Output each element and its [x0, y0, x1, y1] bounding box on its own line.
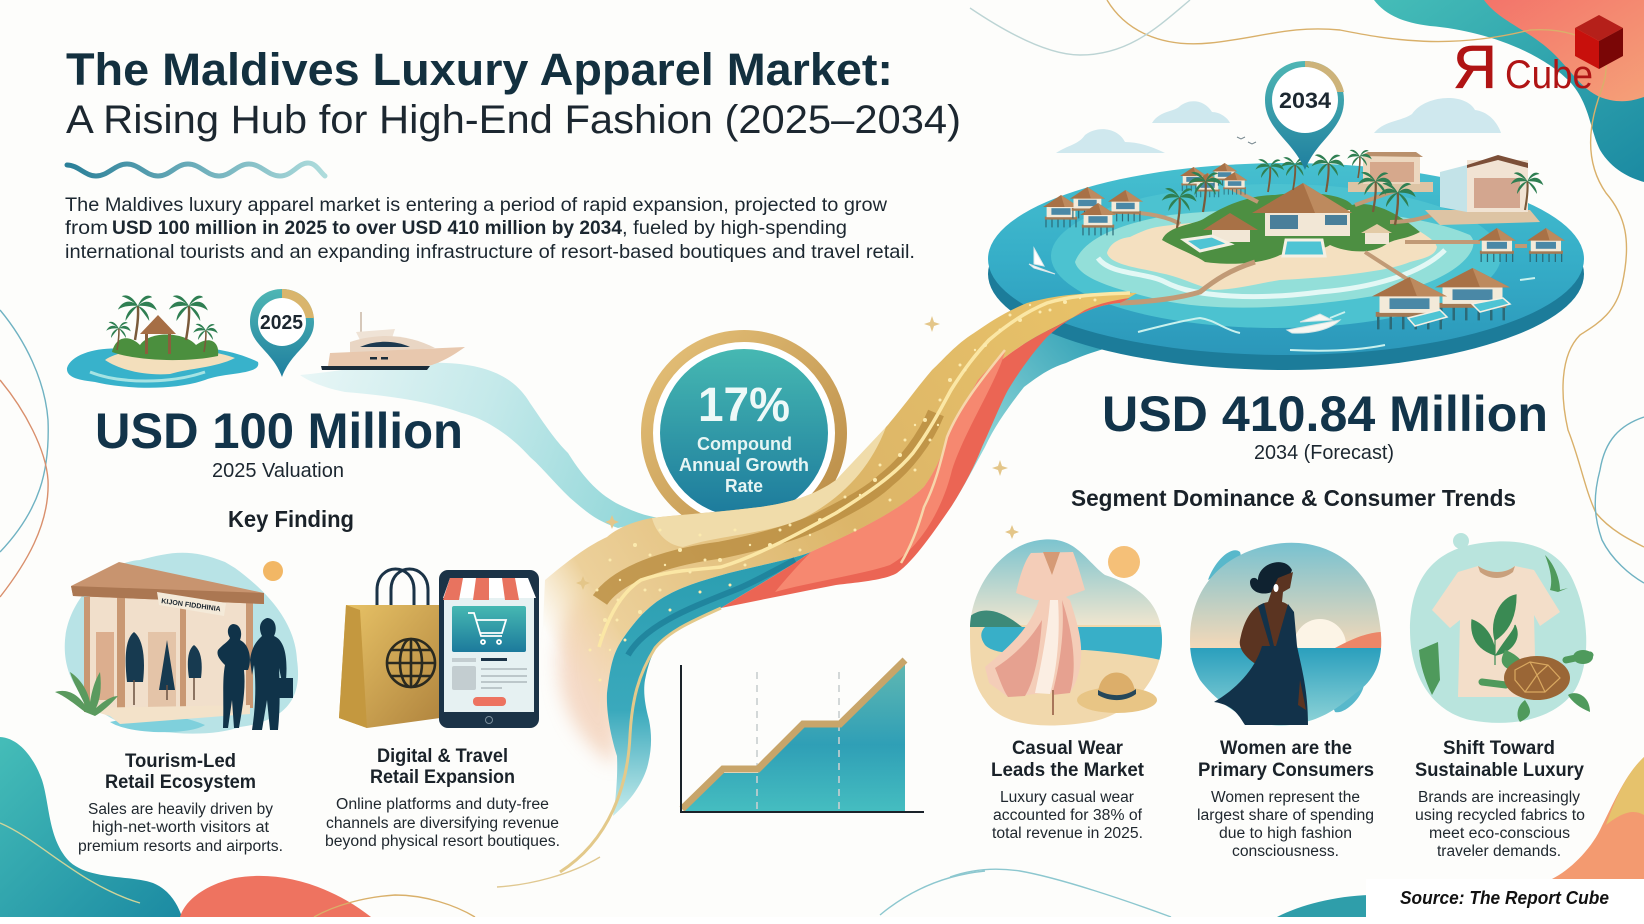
gold sparkles: [588, 297, 1096, 682]
overwater bungalows: [1043, 163, 1565, 329]
blob: bottom left teal: [0, 737, 182, 917]
text: sustainable luxury: Brands are increasingly: [1418, 789, 1580, 806]
title: A Rising Hub for High-End Fashion (2025–2034): [66, 98, 961, 142]
light gold strip near badge: [652, 427, 886, 547]
text: women consumers: largest share of spending: [1197, 807, 1374, 824]
logo: RCube: [1453, 15, 1623, 101]
tablet hero panel: [452, 606, 526, 652]
blob: bottom coral: [180, 876, 371, 917]
hair: [1250, 562, 1292, 594]
gold band: [540, 293, 1137, 760]
area chart: [681, 660, 924, 812]
gazebo: [140, 315, 176, 354]
palms on island: [1162, 150, 1543, 228]
salmon layer: [775, 352, 1005, 592]
intro paragraph: from: [65, 217, 108, 239]
dashed markers: [757, 672, 839, 811]
pools: [1184, 236, 1325, 256]
boat on disk: [1287, 314, 1340, 333]
shallow water swirl: [1075, 209, 1473, 308]
blob: bottom right coral and gold: [1552, 757, 1644, 879]
sun: [1108, 546, 1140, 578]
intro paragraph: USD 100 million in 2025 to over USD 410 million by 2034: [112, 217, 622, 239]
text: tourism-led retail ecosystem: Sales are heavily driven by: [88, 801, 273, 818]
chart growth line: [682, 660, 905, 809]
palms: [106, 295, 218, 352]
light teal ribbon from 2025 to growth badge: [300, 362, 660, 528]
text: tourism-led retail ecosystem: Tourism-Led: [125, 750, 236, 772]
heading: key finding: Key Finding: [228, 506, 354, 532]
mint blob: [1410, 541, 1586, 723]
blob: top right teal: [1374, 0, 1644, 182]
badge text: 17% CAGR: Annual Growth: [679, 455, 809, 475]
2034 clouds: [1056, 98, 1501, 153]
blob: bottom centre-right teal: [1277, 895, 1370, 917]
arm: [1298, 680, 1306, 710]
island bushes: [112, 334, 218, 360]
skin: [1240, 572, 1296, 668]
intro paragraph: international tourists and an expanding infrastructure of resort-based boutiques and travel retail.: [65, 241, 915, 263]
text: sustainable luxury: traveler demands.: [1437, 843, 1561, 860]
text: women consumers: due to high fashion: [1219, 825, 1352, 842]
growth badge: [647, 336, 841, 530]
cart icon: [468, 613, 506, 644]
island sand: [105, 348, 235, 374]
shop sign: KIJON FIDDHINIA: [161, 598, 221, 613]
text: sustainable luxury: Sustainable Luxury: [1415, 759, 1584, 781]
source box: [1366, 879, 1644, 924]
beach scene: [970, 539, 1162, 726]
side huts: [1203, 213, 1392, 244]
island water: [67, 346, 258, 388]
logo: RCube: Cube: [1505, 53, 1593, 97]
earring: [1274, 584, 1278, 592]
pin: 2025: 2025: [260, 312, 303, 334]
2025 island illustration: [67, 295, 258, 388]
label: 2034 forecast: 2034 (Forecast): [1254, 442, 1394, 464]
intro paragraph: The Maldives luxury apparel market is entering a period of rapid expansion, projected to grow: [65, 194, 888, 216]
text: sustainable luxury: using recycled fabrics to: [1415, 807, 1585, 824]
foam line: [1098, 250, 1445, 297]
shop frame: [84, 587, 253, 722]
yacht: [321, 312, 465, 370]
dress back straps: [1258, 603, 1297, 646]
title: [66, 44, 961, 142]
badge text: 17% CAGR: Compound: [697, 434, 792, 454]
sea scene: [1190, 542, 1382, 726]
text: casual wear: Casual Wear: [1012, 737, 1123, 759]
bright gold highlight: [599, 293, 1130, 647]
water ripples: [1138, 278, 1535, 351]
text: casual wear: [991, 737, 1144, 842]
stand: [1052, 690, 1054, 715]
tablet screen: [444, 596, 534, 712]
icon: sustainable t-shirt and turtle: [1410, 533, 1593, 723]
icon: casual wear beach dress: [970, 539, 1162, 726]
disk surface: [988, 163, 1584, 355]
tablet body: [439, 570, 539, 728]
t-shirt: [1432, 566, 1560, 697]
pin: 2025: [250, 289, 314, 377]
text: digital and travel retail: Retail Expansion: [370, 766, 515, 788]
bag globe: [387, 639, 435, 687]
shop sign: [157, 592, 226, 616]
sailboat: [1029, 248, 1055, 274]
intro paragraph: , fueled by high-spending: [622, 217, 847, 239]
disk side: [988, 178, 1584, 370]
text: casual wear: total revenue in 2025.: [992, 825, 1143, 842]
island disk: 2034 resort: [988, 150, 1584, 370]
text: women consumers: consciousness.: [1232, 843, 1339, 860]
sand island: [1107, 219, 1437, 290]
text: tourism-led retail ecosystem: [78, 750, 283, 855]
text: digital and travel retail: Online platforms and duty-free: [336, 796, 549, 813]
icon: tourism retail storefront: [55, 553, 298, 734]
pin: 2034: [1265, 61, 1344, 170]
tablet button: [473, 697, 506, 706]
plant: [55, 672, 118, 716]
couple silhouettes: [217, 624, 250, 728]
coral strand: [721, 298, 1130, 608]
dress: [985, 552, 1085, 697]
badge text: 17% CAGR: 17%: [698, 379, 790, 432]
jungle bushes: [1162, 193, 1420, 264]
main lodge: [1252, 183, 1352, 236]
text: women consumers: Women are the: [1220, 737, 1352, 759]
text: digital and travel retail: beyond physical resort boutiques.: [325, 833, 560, 850]
badge text: 17% CAGR: [679, 379, 809, 496]
recycle arrows: [1419, 555, 1568, 695]
mid water: [1051, 184, 1501, 328]
heading: segment dominance: Segment Dominance & Consumer Trends: [1071, 485, 1516, 511]
headline: USD 100 Million: USD 100 Million: [95, 403, 463, 459]
text: casual wear: Leads the Market: [991, 759, 1144, 781]
bag body: [339, 605, 440, 728]
text: digital and travel retail: channels are diversifying revenue: [326, 815, 559, 832]
island shallow ring: [90, 372, 205, 381]
tablet content: [452, 666, 476, 690]
bag handles: [377, 569, 428, 612]
awning stripes: [443, 578, 536, 598]
hat: [1077, 672, 1157, 713]
teal band under ribbon: [951, 300, 1150, 507]
chart area: [684, 664, 905, 811]
pin: 2034: 2034: [1279, 88, 1332, 113]
dress light panel: [1035, 600, 1059, 694]
logo: RCube: Я: [1453, 34, 1497, 101]
turtle: [1482, 650, 1593, 722]
text: tourism-led retail ecosystem: Retail Ecosystem: [105, 771, 256, 793]
headline: USD 410.84 Million: USD 410.84 Million: [1102, 386, 1548, 442]
text: sustainable luxury: meet eco-conscious: [1429, 825, 1570, 842]
text: tourism-led retail ecosystem: high-net-worth visitors at: [92, 819, 270, 836]
dress shading: [995, 600, 1074, 697]
pier to ribbon: [1120, 262, 1255, 303]
flowing ribbon: [540, 293, 1137, 872]
bird marks: [1237, 137, 1256, 144]
text: tourism-led retail ecosystem: premium resorts and airports.: [78, 838, 283, 855]
accent blobs: [1208, 550, 1364, 712]
dark teal streak: [628, 560, 795, 655]
bottom white strip: [0, 917, 1644, 924]
stars around ribbon: [576, 316, 1019, 590]
icon: shopping bag and tablet: [339, 569, 539, 728]
peach fade: [559, 590, 625, 765]
bungalow plunge pools: [1408, 298, 1510, 326]
text: women consumers: [1197, 737, 1374, 860]
badge text: 17% CAGR: Rate: [725, 476, 763, 496]
text: sustainable luxury: [1415, 737, 1585, 860]
cream line on coral: [901, 350, 1005, 563]
text: digital and travel retail: Digital & Travel: [377, 745, 508, 767]
text: casual wear: accounted for 38% of: [993, 807, 1143, 824]
boutique buildings: [1348, 152, 1540, 225]
shop interior: [88, 592, 248, 710]
text: digital and travel retail: [325, 745, 560, 850]
blob: top right coral: [1484, 0, 1644, 101]
decorative wave under title: [67, 163, 325, 176]
shop roof: [71, 562, 264, 604]
piers: [1118, 185, 1527, 290]
source box: Source: The Report Cube: [1400, 888, 1609, 908]
mannequins: [126, 632, 202, 690]
text: casual wear: Luxury casual wear: [1000, 789, 1134, 806]
shop floor: [82, 705, 250, 724]
navy dress: [1214, 646, 1308, 725]
dark gold streak: [600, 413, 936, 600]
neck: [1043, 552, 1060, 575]
chart axes: [681, 665, 924, 812]
teal strand: [607, 552, 811, 816]
text: sustainable luxury: Shift Toward: [1443, 737, 1555, 759]
leaf emblem: [1472, 595, 1517, 665]
icon: woman consumer silhouette: [1190, 542, 1382, 726]
text: women consumers: Primary Consumers: [1198, 759, 1374, 781]
intro paragraph: [65, 194, 915, 263]
title: The Maldives Luxury Apparel Market:: [66, 44, 893, 95]
text: women consumers: Women represent the: [1211, 789, 1360, 806]
label: 2025 valuation: 2025 Valuation: [212, 460, 344, 482]
gold tail line: [560, 608, 721, 872]
logo cube: [1575, 15, 1623, 69]
